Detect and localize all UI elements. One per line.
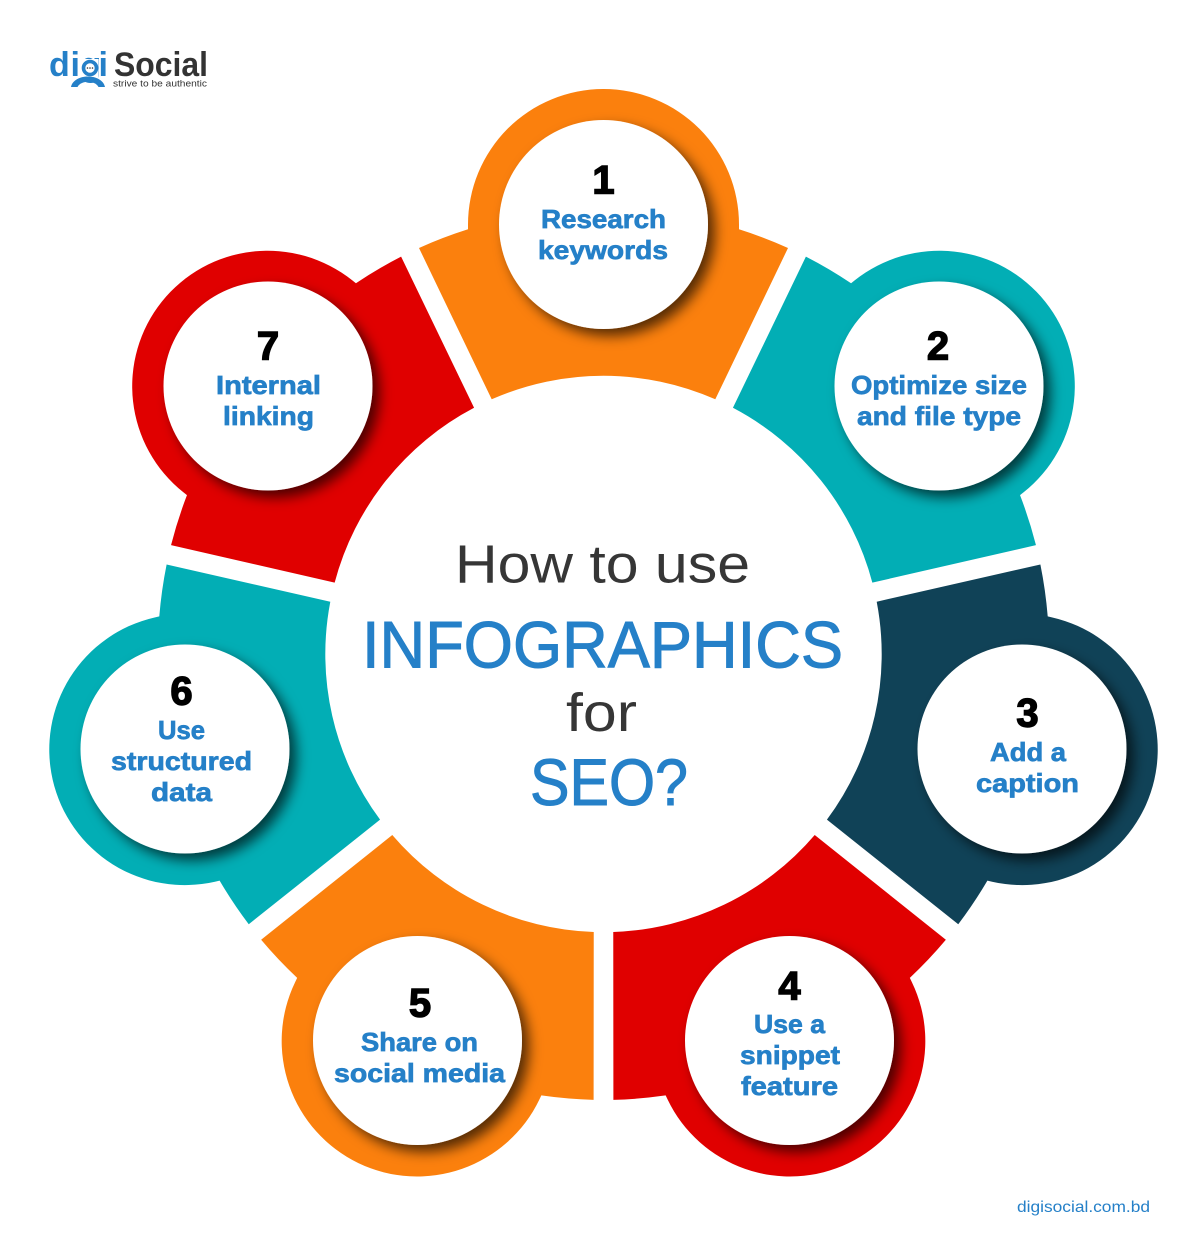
label 3: caption	[976, 768, 1079, 798]
label 4: Use a	[754, 1009, 826, 1039]
segment shape 7	[47, 157, 519, 639]
white circle 7	[164, 282, 372, 490]
label 7: Internal	[216, 370, 321, 400]
label 5	[334, 1027, 506, 1088]
label 5: Share on	[361, 1027, 478, 1057]
logo wordmark: Social: Social	[114, 46, 208, 84]
segment shape 4	[548, 803, 1015, 1243]
label 1: keywords	[538, 235, 668, 265]
title line: INFOGRAPHICS: INFOGRAPHICS	[362, 608, 843, 682]
logo tagline: strive to be authentic	[113, 78, 207, 90]
website url: digisocial.com.bd	[1017, 1199, 1150, 1216]
number 3: 3	[1016, 692, 1039, 736]
white circle 5	[313, 936, 522, 1145]
label 2	[851, 370, 1027, 431]
white circle 1	[499, 120, 708, 329]
label 1: Research	[541, 204, 666, 234]
logo icon: speech bubble head	[80, 59, 99, 79]
segment 3: Add a caption	[811, 531, 1195, 960]
label 6: Use	[158, 715, 205, 745]
label 7	[216, 370, 321, 431]
white circle 2	[834, 282, 1044, 490]
title line: SEO?: SEO?	[530, 745, 688, 819]
segment shape 2	[688, 157, 1160, 639]
logo: digi Social	[49, 46, 208, 90]
number 2: 2	[927, 324, 949, 368]
segment 7: Internal linking	[47, 157, 519, 639]
logo icon: person arc	[71, 76, 105, 87]
number 1: 1	[592, 158, 615, 202]
label 2: and file type	[857, 401, 1021, 431]
segment shape 1	[419, 89, 788, 399]
label 1	[538, 204, 668, 265]
segment shape 6	[12, 531, 396, 960]
segment 1: Research keywords	[419, 89, 788, 399]
segment 4: Use a snippet feature	[548, 803, 1015, 1243]
number 6: 6	[170, 670, 193, 714]
center title	[362, 534, 843, 819]
segment 6: Use structured data	[12, 531, 396, 960]
white circle 4	[685, 936, 894, 1145]
label 4: feature	[741, 1071, 838, 1101]
number 4: 4	[778, 964, 801, 1008]
label 5: social media	[334, 1058, 506, 1088]
label 4: snippet	[740, 1040, 840, 1070]
title line: for: for	[566, 683, 637, 743]
white circle 3	[918, 644, 1126, 854]
label 7: linking	[223, 401, 314, 431]
label 6: data	[151, 777, 213, 807]
segment shape 5	[192, 803, 659, 1243]
title line: How to use: How to use	[455, 534, 750, 594]
segment shape 3	[811, 531, 1195, 960]
label 6: structured	[111, 746, 252, 776]
logo wordmark: digi: digi	[49, 46, 108, 84]
number 5: 5	[409, 982, 431, 1026]
label 4	[740, 1009, 840, 1101]
segment 5: Share on social media	[192, 803, 659, 1243]
segment 2: Optimize size and file type	[688, 157, 1160, 639]
label 3	[976, 737, 1079, 798]
label 2: Optimize size	[851, 370, 1027, 400]
label 3: Add a	[990, 737, 1067, 767]
white circle 6	[80, 644, 290, 854]
number 7: 7	[257, 324, 279, 368]
label 6	[111, 715, 252, 807]
